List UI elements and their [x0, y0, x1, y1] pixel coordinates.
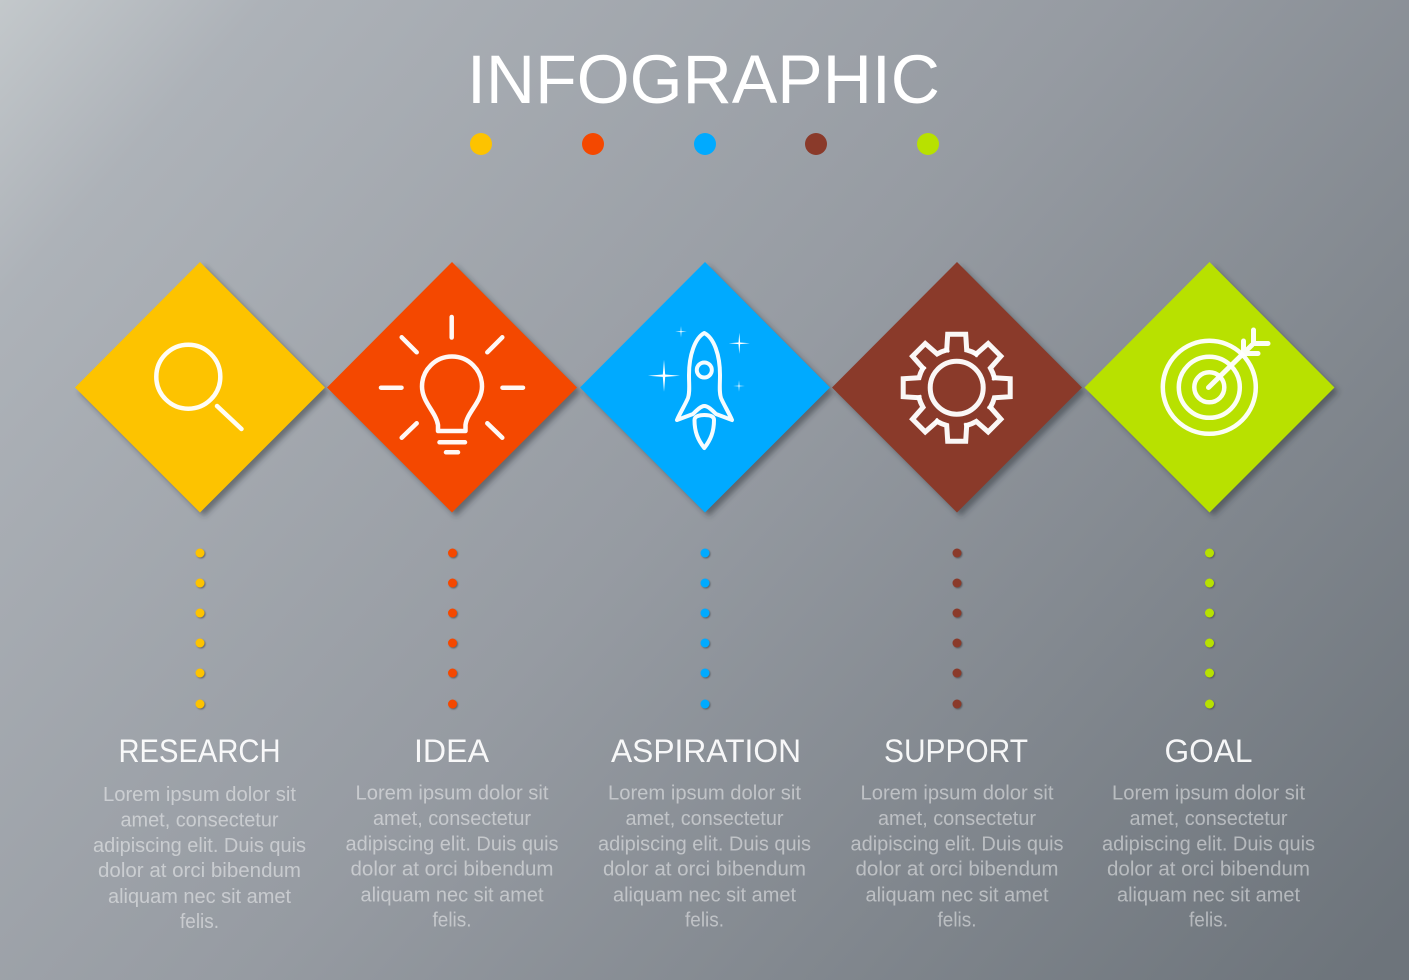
diamond: goal [1084, 262, 1334, 512]
panel: idea [327, 262, 581, 932]
text block: aspiration: Lorem ipsum dolor sit [608, 782, 801, 804]
label: goal: GOAL [1164, 733, 1252, 769]
icon: gear [903, 334, 1010, 441]
text block: goal [1102, 782, 1315, 932]
icon: magnifying glass [156, 345, 242, 429]
text block: research: amet, consectetur [120, 810, 279, 832]
text block: aspiration: dolor at orci bibendum [603, 858, 806, 880]
text block: idea: aliquam nec sit amet [360, 884, 544, 906]
panel: goal [1084, 262, 1338, 932]
label: support: SUPPORT [884, 733, 1028, 769]
dotted connector: aspiration [700, 548, 710, 710]
icon: target with arrow [1163, 330, 1268, 434]
text block: research [93, 784, 306, 933]
text block: idea: Lorem ipsum dolor sit [356, 782, 549, 804]
text block: support: amet, consectetur [878, 808, 1036, 830]
text block: goal: dolor at orci bibendum [1107, 858, 1310, 880]
diamond: research [75, 262, 325, 512]
label: aspiration: ASPIRATION [611, 733, 801, 769]
text block: support: adipiscing elit. Duis quis [850, 834, 1064, 856]
diamond: aspiration [580, 262, 830, 512]
text block: aspiration: felis. [685, 910, 724, 932]
text block: goal: amet, consectetur [1130, 808, 1288, 830]
text block: support: dolor at orci bibendum [856, 858, 1058, 880]
colour legend dots [470, 133, 939, 155]
text block: aspiration: amet, consectetur [626, 808, 784, 830]
text block: idea: felis. [432, 910, 472, 932]
panel: aspiration [580, 262, 834, 932]
text block: idea: dolor at orci bibendum [350, 858, 554, 880]
title: INFOGRAPHIC [467, 41, 940, 118]
text block: support: felis. [938, 910, 976, 932]
text block: research: felis. [180, 911, 219, 933]
icon: light bulb [381, 317, 523, 452]
text block: goal: aliquam nec sit amet [1117, 884, 1300, 906]
dotted connector: support [952, 548, 962, 710]
text block: research: Lorem ipsum dolor sit [103, 784, 296, 806]
text block: goal: adipiscing elit. Duis quis [1102, 834, 1315, 856]
dotted connector: goal [1205, 548, 1215, 710]
text block: idea [346, 782, 558, 932]
icon: rocket [648, 326, 750, 448]
diamond: support [832, 262, 1082, 512]
text block: goal: felis. [1189, 910, 1228, 932]
text block: support: Lorem ipsum dolor sit [860, 782, 1054, 804]
text block: aspiration: adipiscing elit. Duis quis [598, 834, 811, 856]
text block: research: adipiscing elit. Duis quis [93, 835, 306, 857]
text block: support [850, 782, 1064, 932]
text block: idea: adipiscing elit. Duis quis [346, 834, 558, 856]
text block: support: aliquam nec sit amet [866, 884, 1049, 906]
dotted connector: idea [448, 548, 458, 710]
label: idea: IDEA [414, 733, 490, 769]
diamond: idea [327, 262, 577, 512]
text block: research: aliquam nec sit amet [108, 886, 291, 908]
text block: aspiration [598, 782, 811, 932]
text block: aspiration: aliquam nec sit amet [613, 884, 796, 906]
text block: goal: Lorem ipsum dolor sit [1112, 782, 1305, 804]
panel: support [832, 262, 1086, 932]
panel: research [75, 262, 329, 933]
label: research: RESEARCH [118, 733, 280, 769]
dotted connector: research [196, 548, 206, 710]
text block: idea: amet, consectetur [373, 808, 531, 830]
text block: research: dolor at orci bibendum [98, 860, 301, 882]
